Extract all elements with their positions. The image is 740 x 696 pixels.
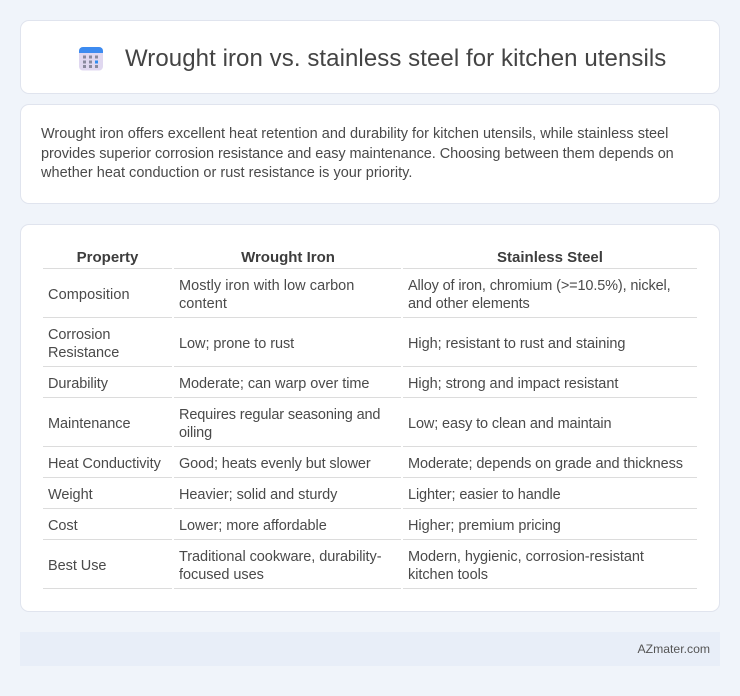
comparison table: Mostly iron with low carbon	[179, 278, 354, 294]
comparison table: focused uses	[179, 567, 264, 583]
comparison table: content	[179, 296, 227, 312]
row: maintenance: Maintenance	[48, 416, 130, 432]
comparison table: Requires regular seasoning and	[179, 407, 380, 423]
header: property: Property	[77, 249, 138, 266]
row: composition: Composition	[48, 287, 130, 303]
intro paragraph: whether heat conduction or rust resistance is your priority.	[41, 165, 412, 181]
footer bar	[20, 632, 720, 666]
header: wrought iron: Wrought Iron	[241, 249, 335, 266]
title: Wrought iron vs. stainless steel for kitchen utensils	[125, 45, 666, 72]
row: corrosion resistance	[48, 327, 119, 361]
comparison table: High; resistant to rust and staining	[408, 336, 625, 352]
comparison table: Lighter; easier to handle	[408, 487, 561, 503]
row: corrosion resistance: Corrosion	[48, 327, 110, 343]
intro paragraph: Wrought iron offers excellent heat retention and durability for kitchen utensils, while stainless steel	[41, 126, 668, 142]
comparison table: Heavier; solid and sturdy	[179, 487, 337, 503]
comparison table: High; strong and impact resistant	[408, 376, 618, 392]
comparison table: Lower; more affordable	[179, 518, 327, 534]
comparison table: kitchen tools	[408, 567, 488, 583]
row: heat conductivity: Heat Conductivity	[48, 456, 161, 472]
icon: calendar	[79, 47, 103, 70]
footer credit: AZmater.com	[638, 642, 710, 656]
comparison table: Traditional cookware, durability-	[179, 549, 382, 565]
comparison table: Modern, hygienic, corrosion-resistant	[408, 549, 644, 565]
comparison table: Good; heats evenly but slower	[179, 456, 371, 472]
comparison table: oiling	[179, 425, 212, 441]
comparison table: Low; prone to rust	[179, 336, 294, 352]
comparison table: Moderate; depends on grade and thickness	[408, 456, 683, 472]
comparison table: Moderate; can warp over time	[179, 376, 369, 392]
comparison table: Higher; premium pricing	[408, 518, 561, 534]
intro paragraph	[41, 126, 674, 181]
table card	[20, 224, 720, 612]
row: weight: Weight	[48, 487, 93, 503]
row: best use: Best Use	[48, 558, 106, 574]
header: stainless steel: Stainless Steel	[497, 249, 603, 266]
comparison table: Alloy of iron, chromium (>=10.5%), nickel,	[408, 278, 670, 294]
intro text card	[20, 104, 720, 204]
row: corrosion resistance: Resistance	[48, 345, 119, 361]
row: durability: Durability	[48, 376, 108, 392]
row: cost: Cost	[48, 518, 78, 534]
title card	[20, 20, 720, 94]
comparison table: Low; easy to clean and maintain	[408, 416, 611, 432]
comparison table: and other elements	[408, 296, 530, 312]
intro paragraph: provides superior corrosion resistance and easy maintenance. Choosing between them depends on	[41, 146, 674, 162]
